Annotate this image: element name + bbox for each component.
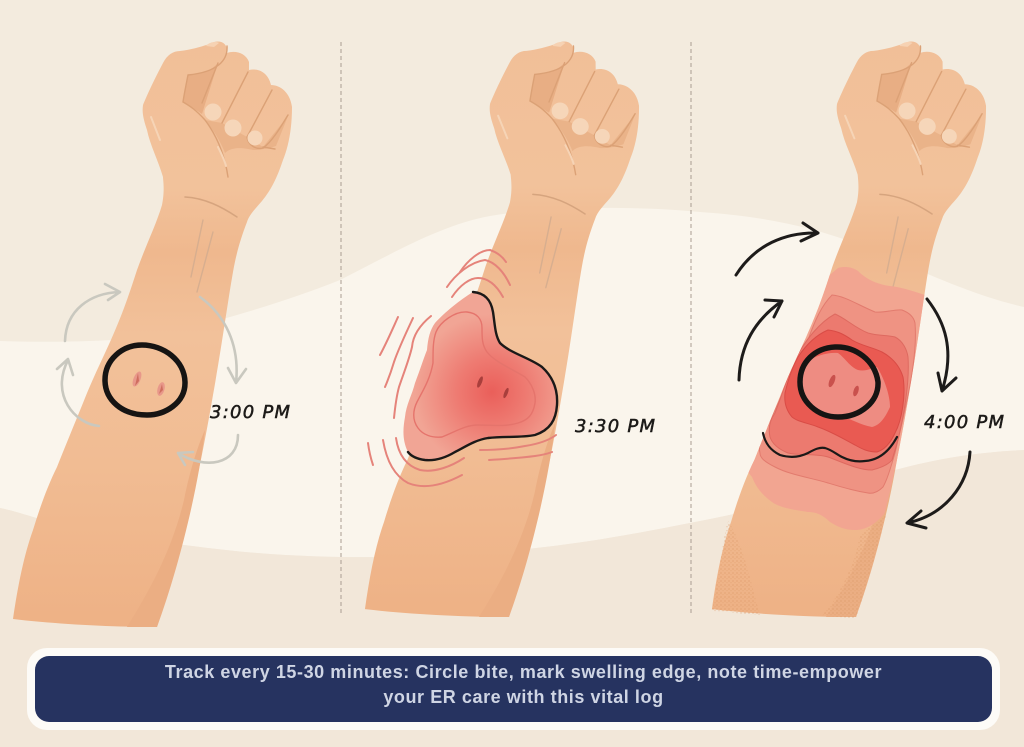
layer 2 [759, 295, 915, 493]
black swelling edge line [763, 433, 897, 461]
arrows: black circular cycle [736, 223, 970, 528]
background: lower tone [0, 450, 1024, 747]
banner text block [35, 656, 992, 722]
forearm and fist 3 [706, 41, 991, 617]
banner text block: Track every 15-30 minutes: Circle bite, mark swelling edge, note time-empower [165, 662, 882, 682]
layer 4 core [785, 330, 904, 452]
skin stipple texture [712, 515, 886, 618]
time label: 3:30 PM [575, 416, 656, 437]
banner text block: your ER care with this vital log [383, 687, 664, 707]
time label: 3:00 PM [210, 402, 291, 423]
black circle around bite [800, 347, 878, 417]
lighter centre blob [802, 353, 890, 427]
swelling layers [748, 267, 924, 530]
layer 1 outer [748, 267, 924, 530]
inner swelling contour [414, 312, 535, 437]
black swelling edge line [408, 292, 557, 460]
radiating swelling lines [368, 250, 556, 486]
arrows: faint circular cycle [57, 284, 246, 465]
panel: arm at 3:30 PM [359, 41, 656, 617]
black circle around bite [105, 345, 185, 415]
bite marks [476, 376, 510, 399]
panel dividers [341, 42, 691, 615]
panel: arm at 4:00 PM [706, 41, 1005, 618]
forearm and fist 1 [13, 41, 292, 627]
background: light wave band [0, 208, 1024, 557]
illustration: three forearms with swelling progression [0, 42, 1024, 627]
banner: tracking instruction [27, 648, 1000, 730]
bite marks [131, 370, 166, 397]
swelling area [403, 292, 557, 460]
layer 3 [769, 314, 908, 470]
bite marks [827, 374, 860, 397]
time label: 4:00 PM [924, 412, 1005, 433]
panel: arm at 3:00 PM [13, 41, 292, 627]
forearm and fist 2 [359, 41, 644, 617]
